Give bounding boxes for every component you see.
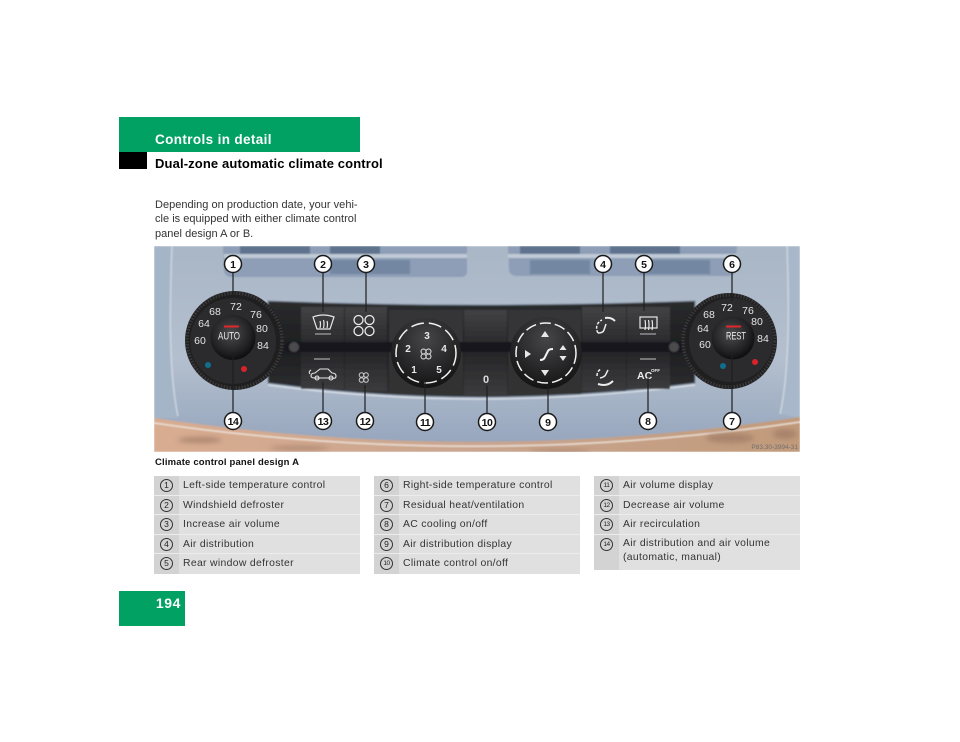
legend row 2: Windshield defroster <box>183 500 284 510</box>
right temperature dial: 76 <box>742 305 754 317</box>
legend row 9: 9 <box>384 538 389 548</box>
photo caption: Climate control panel design A <box>155 457 299 468</box>
legend row 10: Climate control on/off <box>403 558 508 569</box>
legend row 14: Air distribution and air volume <box>623 538 770 548</box>
right temperature dial <box>681 293 777 389</box>
photo: climate control panel <box>154 246 800 452</box>
air volume dial: 4 <box>441 344 447 355</box>
right temperature dial: 60 <box>699 339 711 351</box>
label: climate off: 0 <box>483 374 489 386</box>
right temperature dial: 80 <box>751 316 763 328</box>
legend row 3 <box>154 515 360 534</box>
legend row 14: 14 <box>603 540 610 548</box>
AUTO knob: AUTO <box>218 330 240 342</box>
legend row 5 <box>154 554 360 574</box>
right temperature dial: 68 <box>703 309 715 321</box>
dark control strip <box>268 301 695 399</box>
legend row 4 <box>154 534 360 554</box>
callout numbers: 8 <box>645 416 651 428</box>
legend row 4: 4 <box>164 538 169 548</box>
legend row 6: Right-side temperature control <box>403 480 553 491</box>
legend row 9: Air distribution display <box>403 538 512 550</box>
intro text <box>155 198 358 240</box>
legend row 7: Residual heat/ventilation <box>403 500 524 510</box>
legend row 4: Air distribution <box>183 538 254 550</box>
legend row 6 <box>374 476 580 496</box>
icon: air distribution down <box>597 369 613 385</box>
callout numbers: 5 <box>641 259 647 271</box>
callout numbers: 3 <box>363 259 369 271</box>
legend row 7 <box>374 496 580 515</box>
air volume dial: 3 <box>424 331 430 342</box>
callout lines <box>233 272 732 414</box>
legend table: 6 to 10 <box>374 476 580 574</box>
control buttons <box>285 307 685 395</box>
page number block <box>119 591 185 626</box>
legend table: 1 to 5 <box>154 476 360 574</box>
legend row 6: 6 <box>384 480 389 490</box>
left temperature dial: 76 <box>250 309 262 321</box>
chapter title: Controls in detail <box>155 132 272 147</box>
icon: small fan in dial <box>421 349 431 359</box>
right temperature dial: 72 <box>721 302 733 314</box>
callout numbers: 11 <box>420 417 431 429</box>
callout numbers <box>224 256 740 430</box>
legend row 1: Left-side temperature control <box>183 480 325 491</box>
callout numbers: 14 <box>228 416 239 428</box>
legend row 11: 11 <box>604 482 609 489</box>
page number: 194 <box>156 595 181 611</box>
photo reference code: P83.30-3994-31 <box>751 444 798 451</box>
left temperature dial: 64 <box>198 318 210 330</box>
label: AC off: AC <box>637 370 653 382</box>
intro text: Depending on production date, your vehi- <box>155 198 358 210</box>
intro text: panel design A or B. <box>155 228 253 240</box>
wood trim <box>154 417 800 452</box>
icon: recirculation car <box>309 358 336 380</box>
legend row 1 <box>154 476 360 496</box>
REST knob: REST <box>726 330 746 342</box>
legend row 7: 7 <box>384 500 389 510</box>
legend row 5: Rear window defroster <box>183 558 294 569</box>
header band: Controls in detail <box>119 117 360 152</box>
callout numbers: 4 <box>600 259 606 271</box>
section heading: Dual-zone automatic climate control <box>155 156 383 171</box>
right temperature dial: 84 <box>757 333 769 345</box>
legend row 14 <box>594 534 800 570</box>
legend row 13: Air recirculation <box>623 519 700 530</box>
legend row 13 <box>594 515 800 534</box>
legend row 8: AC cooling on/off <box>403 519 488 530</box>
legend row 12: Decrease air volume <box>623 500 725 510</box>
left temperature dial: 80 <box>256 323 268 335</box>
left temperature dial: 84 <box>257 340 269 352</box>
legend row 2: 2 <box>164 500 169 510</box>
right temperature dial: 64 <box>697 323 709 335</box>
left temperature dial <box>185 291 284 390</box>
callout numbers: 2 <box>320 259 326 271</box>
legend row 1: 1 <box>164 480 169 490</box>
legend table: 11 to 14 <box>594 476 800 570</box>
legend row 12: 12 <box>603 502 610 508</box>
legend row 9 <box>374 534 580 554</box>
left temperature dial: 60 <box>194 335 206 347</box>
legend row 10 <box>374 554 580 574</box>
panel surround <box>154 246 800 452</box>
icon: windshield defroster <box>313 315 334 335</box>
air vents <box>223 246 737 277</box>
label: AC off: OFF <box>651 368 660 373</box>
left temperature dial: 68 <box>209 306 221 318</box>
legend row 12 <box>594 496 800 515</box>
left temperature dial: 72 <box>230 301 242 313</box>
air volume dial: 2 <box>405 344 411 355</box>
legend row 14: (automatic, manual) <box>623 552 721 563</box>
legend row 10: 10 <box>383 560 390 567</box>
callout numbers: 6 <box>729 259 735 271</box>
icon: decrease fan <box>359 373 368 382</box>
icon: rear window defroster <box>640 317 657 335</box>
legend row 5: 5 <box>164 558 169 568</box>
callout numbers: 1 <box>230 259 236 271</box>
air distribution dial <box>510 317 582 389</box>
legend row 8 <box>374 515 580 534</box>
callout numbers: 13 <box>318 416 329 428</box>
icon: increase fan <box>354 316 374 336</box>
black header tab <box>119 152 147 169</box>
label: AC off <box>637 358 660 382</box>
callout numbers: 12 <box>360 416 371 428</box>
legend row 11: Air volume display <box>623 480 713 491</box>
air volume dial <box>391 318 461 388</box>
icon: air distribution up <box>597 318 615 333</box>
callout numbers: 7 <box>729 416 735 428</box>
legend row 13: 13 <box>603 521 610 528</box>
legend row 11 <box>594 476 800 496</box>
callout numbers: 9 <box>545 417 551 429</box>
legend row 3: 3 <box>164 519 169 529</box>
callout numbers: 10 <box>482 417 493 429</box>
legend row 8: 8 <box>384 519 389 529</box>
intro text: cle is equipped with either climate control <box>155 213 356 225</box>
legend row 3: Increase air volume <box>183 519 280 530</box>
legend row 2 <box>154 496 360 515</box>
air volume dial: 5 <box>436 365 442 376</box>
air volume dial: 1 <box>411 365 417 376</box>
